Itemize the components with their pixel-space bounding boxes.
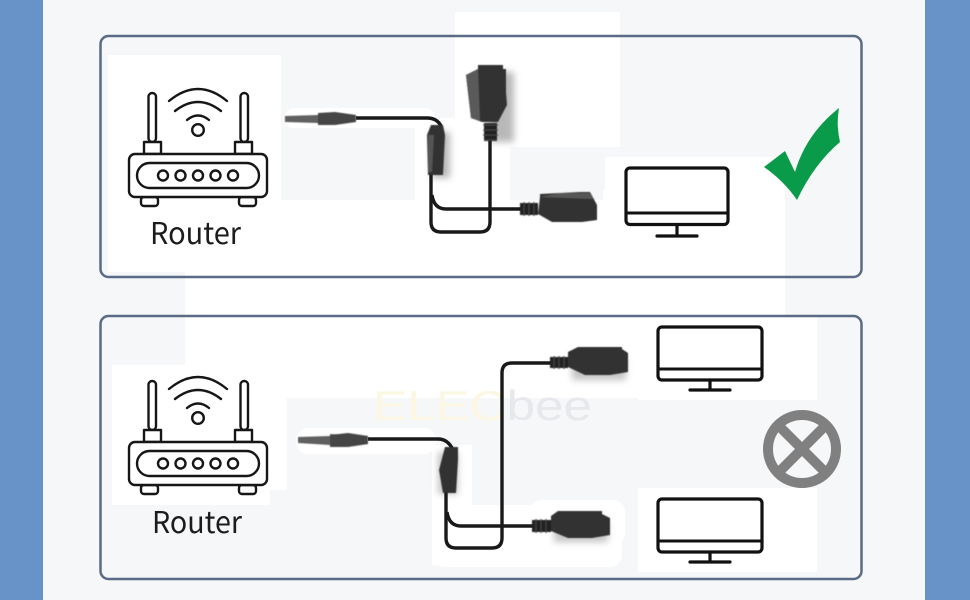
panel: incorrect connection <box>100 316 862 579</box>
icon: green check mark <box>764 108 840 200</box>
icon: router bottom <box>129 377 267 494</box>
icon: monitor top <box>626 168 728 236</box>
panel: correct connection <box>100 36 862 277</box>
icon: grey cross circle <box>768 415 836 483</box>
icon: monitor bottom one <box>658 327 762 390</box>
icon: router top <box>129 89 267 206</box>
label: router top: Router <box>150 209 241 253</box>
icon: monitor bottom two <box>658 499 762 562</box>
label: router bottom: Router <box>152 498 242 542</box>
Y cable top <box>285 65 597 232</box>
watermark: ELEC bee <box>373 382 592 429</box>
Y cable bottom <box>298 347 628 548</box>
